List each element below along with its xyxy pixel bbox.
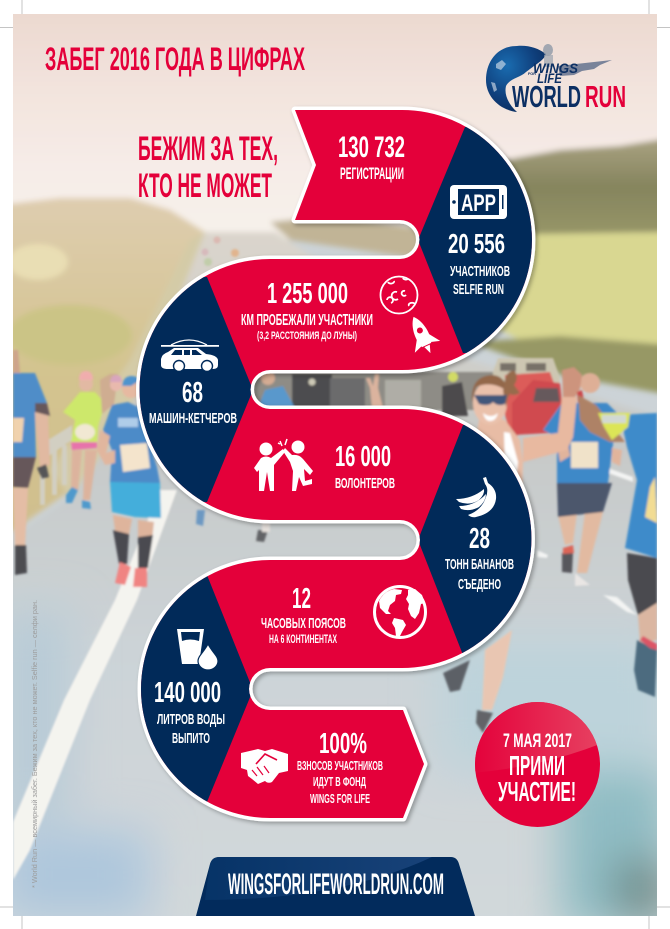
stat: water: 140 000 bbox=[154, 677, 221, 709]
stat: time zones: 12 bbox=[292, 583, 311, 615]
icon: bananas bbox=[456, 477, 496, 517]
icon: moon bbox=[380, 276, 418, 314]
stat: registrations: 130 732 bbox=[338, 131, 405, 164]
slogan: КТО НЕ МОЖЕТ bbox=[138, 167, 272, 205]
callout: join on 7 May 2017: 7 МАЯ 2017 bbox=[503, 731, 572, 752]
stat: time zones bbox=[261, 583, 346, 646]
icon: high five bbox=[254, 439, 313, 491]
logo: Wings for Life World Run: WINGS bbox=[533, 60, 579, 76]
title: ЗАБЕГ 2016 ГОДА В ЦИФРАХ bbox=[45, 41, 305, 77]
stat: kilometres: 1 255 000 bbox=[267, 278, 348, 310]
logo: Wings for Life World Run: WORLD bbox=[512, 79, 581, 114]
website banner bbox=[196, 857, 475, 916]
guard rail bbox=[40, 425, 72, 505]
stat: volunteers: ВОЛОНТЕРОВ bbox=[335, 475, 395, 492]
vehicles behind the slot bbox=[254, 372, 494, 410]
stat: time zones: ЧАСОВЫХ ПОЯСОВ bbox=[261, 615, 346, 632]
stat: time zones: НА 6 КОНТИНЕНТАХ bbox=[269, 632, 337, 646]
callout: join on 7 May 2017: УЧАСТИЕ! bbox=[498, 776, 576, 807]
slogan: БЕЖИМ ЗА ТЕХ, bbox=[138, 130, 278, 168]
callout: join on 7 May 2017: ПРИМИ bbox=[509, 750, 565, 781]
foreground runner bbox=[578, 395, 625, 442]
stat: kilometres: КМ ПРОБЕЖАЛИ УЧАСТНИКИ bbox=[241, 312, 373, 329]
icon: app phone: APP bbox=[461, 190, 496, 217]
icon: globe bbox=[374, 586, 426, 638]
stat: selfie run: SELFIE RUN bbox=[453, 281, 504, 298]
stat: bananas: ТОНН БАНАНОВ bbox=[445, 556, 514, 573]
yellow shirt runner bbox=[71, 450, 97, 500]
woman runner bbox=[482, 630, 512, 710]
stat: water: ЛИТРОВ ВОДЫ bbox=[157, 711, 225, 728]
stat: cars: МАШИН-КЕТЧЕРОВ bbox=[149, 410, 237, 427]
logo: Wings for Life World Run: LIFE bbox=[537, 70, 563, 86]
cars bbox=[493, 358, 560, 390]
stat: selfie run: 20 556 bbox=[448, 228, 505, 259]
stat: volunteers: 16 000 bbox=[335, 441, 391, 473]
stat: selfie run bbox=[448, 228, 510, 298]
distant runners bbox=[201, 236, 240, 266]
icon: rocket bbox=[401, 311, 443, 359]
stat: cars bbox=[149, 377, 237, 427]
serpentine ribbon bbox=[136, 106, 540, 826]
icon: car with roof rack bbox=[161, 340, 219, 372]
icon: app phone bbox=[450, 185, 507, 219]
icon: handshake bbox=[241, 749, 288, 784]
stat: volunteers bbox=[335, 441, 395, 492]
stat: kilometres: (3,2 РАССТОЯНИЯ ДО ЛУНЫ) bbox=[257, 330, 357, 342]
stat: bananas: СЪЕДЕНО bbox=[458, 576, 501, 593]
stat: entry fees: ИДУТ В ФОНД bbox=[313, 775, 366, 789]
stat: cars: 68 bbox=[182, 377, 203, 409]
logo: Wings for Life World Run: FOR bbox=[528, 71, 536, 76]
stat: bananas: 28 bbox=[469, 523, 490, 555]
stat: bananas bbox=[445, 523, 514, 593]
logo: Wings for Life World Run: RUN bbox=[585, 79, 626, 114]
stat: registrations: РЕГИСТРАЦИИ bbox=[340, 165, 404, 183]
far left runner bbox=[13, 373, 47, 457]
runner behind bbox=[558, 512, 603, 573]
icon: water glass and drop bbox=[177, 629, 218, 670]
blue shirt runner bbox=[113, 515, 154, 540]
stat: water bbox=[154, 677, 225, 747]
stat: entry fees bbox=[297, 728, 383, 806]
road markings bbox=[13, 490, 177, 880]
stat: kilometres bbox=[241, 278, 373, 342]
logo: Wings for Life World Run bbox=[486, 44, 626, 114]
stat: selfie run: УЧАСТНИКОВ bbox=[450, 263, 510, 280]
stat: entry fees: ВЗНОСОВ УЧАСТНИКОВ bbox=[297, 759, 383, 773]
stat: entry fees: 100% bbox=[319, 728, 367, 760]
stat: water: ВЫПИТО bbox=[172, 730, 210, 747]
stat: entry fees: WINGS FOR LIFE bbox=[310, 792, 370, 806]
slogan bbox=[138, 130, 278, 205]
shoes under the ribbon bbox=[196, 510, 205, 526]
pale photo haze bbox=[13, 143, 657, 916]
vertical footnote: * World Run — всемирный забег. Бежим за тех, кто не может. Selfie run — селфи ран. bbox=[30, 600, 39, 888]
stat: registrations bbox=[338, 131, 405, 183]
callout: join on 7 May 2017 bbox=[475, 702, 600, 827]
